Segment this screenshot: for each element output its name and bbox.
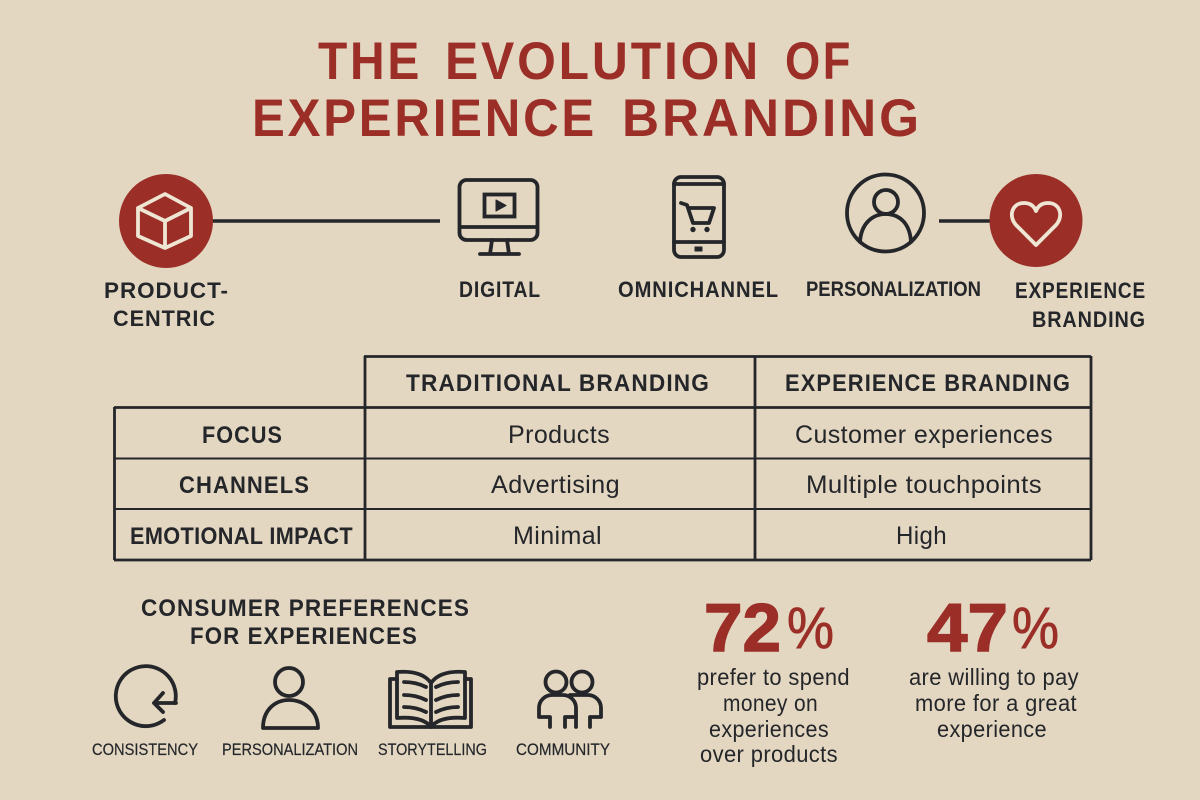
stat: 72 percent: 72 (704, 590, 781, 666)
row: emotional impact: High (896, 522, 947, 550)
icon: open book (390, 672, 471, 727)
row: focus: Products (508, 421, 610, 449)
label: product-centric: CENTRIC (113, 306, 216, 331)
table header: EXPERIENCE BRANDING (785, 370, 1071, 397)
label: product-centric: PRODUCT- (104, 278, 229, 303)
row: emotional impact (130, 522, 947, 550)
stat: 47 percent: % (1012, 596, 1059, 661)
icon: user in circle (847, 174, 924, 252)
label: personalization: PERSONALIZATION (806, 278, 981, 301)
row: focus: FOCUS (202, 422, 283, 449)
title: EVOLUTION (445, 32, 761, 91)
stat: 47 percent: experience (937, 716, 1047, 742)
stat: 47 percent: 47 (927, 590, 1008, 666)
timeline connector: personalization to experience branding (939, 219, 990, 223)
label: storytelling: STORYTELLING (378, 740, 487, 759)
heading: consumer preferences: FOR EXPERIENCES (190, 623, 418, 650)
title: OF (785, 32, 853, 91)
timeline connector: product-centric to digital (212, 219, 440, 223)
stat: 47 percent (909, 590, 1079, 742)
stat: 47 percent: are willing to pay (909, 664, 1079, 690)
stat: 72 percent: experiences (709, 716, 829, 742)
table inner rules (114, 458, 1091, 509)
row: channels (179, 471, 1042, 499)
label: experience branding: EXPERIENCE (1015, 278, 1146, 303)
title: BRANDING (622, 89, 922, 148)
label: experience branding (1015, 278, 1146, 332)
title (252, 32, 922, 148)
row: focus: Customer experiences (795, 421, 1053, 449)
label: product-centric (104, 278, 229, 331)
icon: person (263, 668, 318, 728)
label: experience branding: BRANDING (1032, 307, 1146, 332)
table outer rules (114, 356, 1091, 560)
icon: community (539, 672, 601, 727)
heading: consumer preferences (141, 595, 470, 650)
stat: 72 percent: over products (700, 741, 838, 767)
row: channels: CHANNELS (179, 472, 310, 499)
stat: 47 percent: more for a great (915, 690, 1077, 716)
title: EXPERIENCE (252, 89, 597, 148)
label: omnichannel: OMNICHANNEL (618, 277, 779, 302)
icon: heart (990, 174, 1082, 267)
label: personalization: PERSONALIZATION (222, 740, 358, 759)
icon: consistency arrow (116, 666, 176, 726)
heading: consumer preferences: CONSUMER PREFERENCES (141, 595, 470, 622)
stat: 72 percent: money on (723, 690, 818, 716)
table header: TRADITIONAL BRANDING (406, 370, 710, 397)
row: channels: Advertising (491, 471, 620, 499)
row: emotional impact: Minimal (513, 522, 602, 550)
stat: 72 percent (697, 590, 850, 767)
comparison table (114, 356, 1091, 560)
label: digital: DIGITAL (459, 277, 541, 302)
icon: product box (119, 174, 213, 268)
icon: monitor with play button (460, 180, 538, 254)
title: THE (318, 32, 422, 91)
label: consistency: CONSISTENCY (92, 740, 198, 759)
row: emotional impact: EMOTIONAL IMPACT (130, 523, 353, 550)
stat: 72 percent: % (787, 596, 834, 661)
label: community: COMMUNITY (516, 740, 610, 759)
row: focus (202, 421, 1053, 449)
stat: 72 percent: prefer to spend (697, 664, 850, 690)
row: channels: Multiple touchpoints (806, 471, 1042, 499)
table header (406, 370, 1071, 397)
icon: phone with shopping cart (674, 177, 724, 257)
